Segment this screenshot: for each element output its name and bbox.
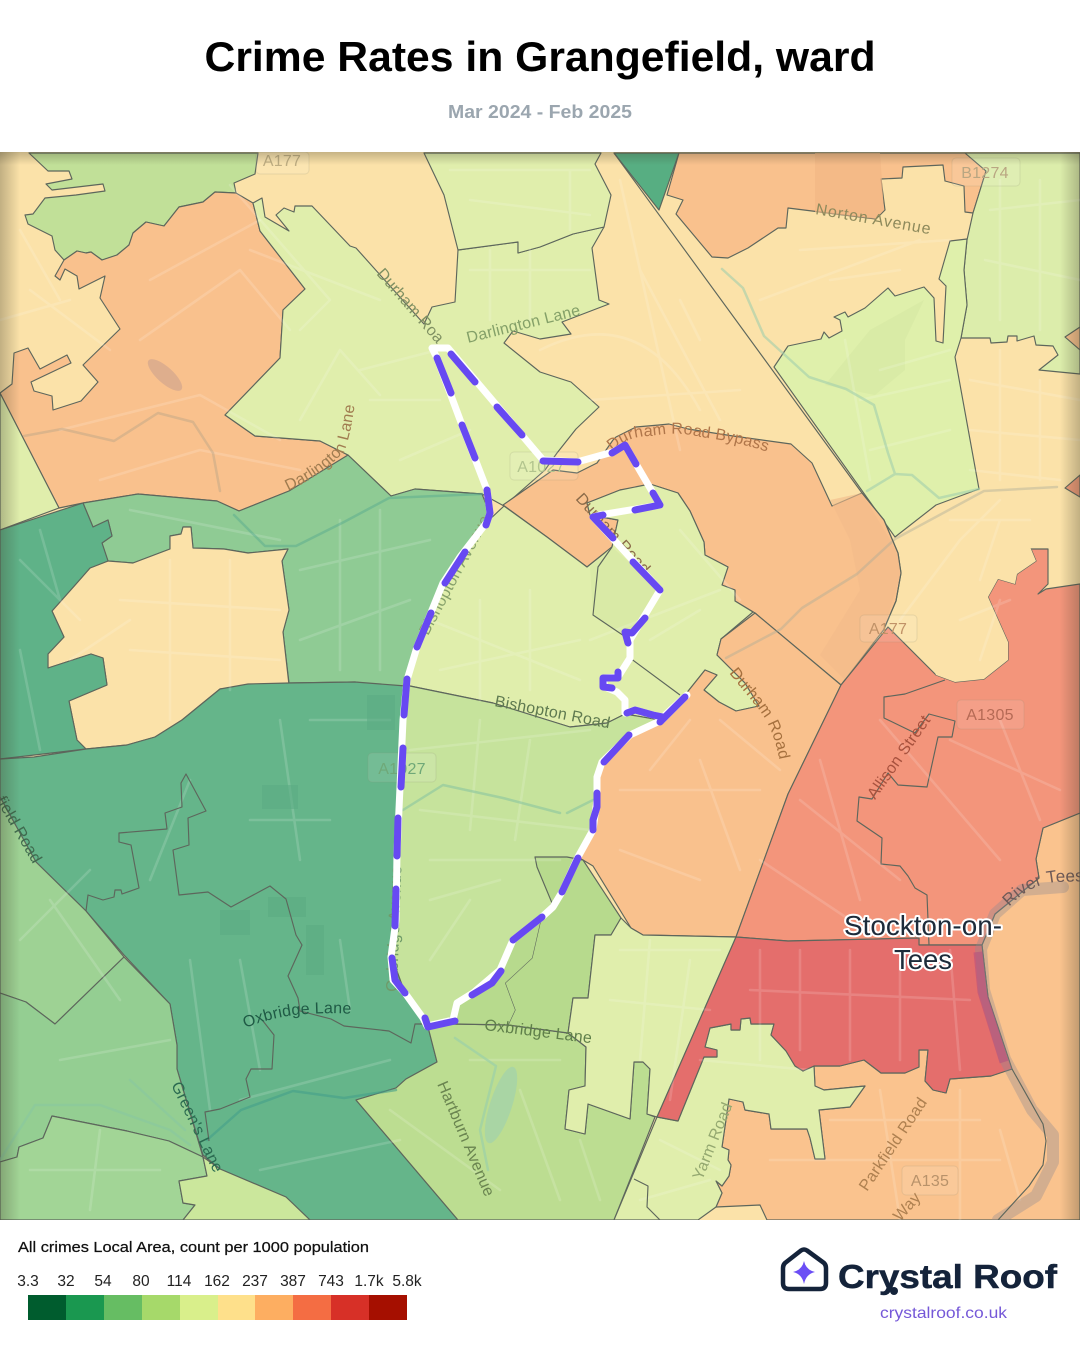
legend value labels: 5.8k — [392, 1273, 422, 1290]
ward outline white — [391, 348, 687, 1026]
label A135: A135 — [911, 1173, 949, 1190]
label Oxbridge Lane west: Oxbridge Lane — [244, 1002, 351, 1026]
legend value labels: 80 — [132, 1273, 150, 1290]
area: small edge orange — [1065, 327, 1080, 350]
label A1027 north: A1027 — [517, 459, 565, 476]
ward inner cell shade — [603, 547, 612, 555]
area: small lime cell south — [179, 1157, 310, 1220]
area: north-west green — [25, 153, 258, 260]
icon: house with star — [783, 1250, 826, 1289]
area: Durham Road north yellow-green — [225, 198, 609, 506]
legend value labels: 114 — [167, 1273, 192, 1290]
ward outline purple dashes — [392, 354, 685, 1027]
shield A1305 — [957, 700, 1024, 729]
label A1305: A1305 — [966, 707, 1014, 724]
area: south-east orange — [716, 813, 1080, 1220]
legend value labels: 32 — [57, 1273, 75, 1290]
legend value labels — [17, 1273, 422, 1290]
area: mid green north-west of ward — [83, 455, 490, 690]
place label: Stockton-on-Tees — [844, 910, 1002, 975]
label Bishopton Road: Bishopton Road — [493, 693, 612, 732]
subtitle: date range: Mar 2024 - Feb 2025 — [448, 101, 632, 122]
subtle building blocks in dark green — [220, 695, 395, 975]
label Durham Road north: Durham Roa — [373, 265, 447, 347]
icon: key drop on y — [890, 1287, 898, 1295]
road shields — [256, 152, 1024, 1195]
place label: Stockton-on-Tees: Tees — [894, 944, 952, 975]
shield A177 north — [256, 152, 309, 174]
bypass darker shade — [830, 493, 900, 680]
label Oxbridge Avenue: Oxbridge Avenue — [384, 865, 405, 992]
place label: Stockton-on-Tees: Stockton-on- — [844, 910, 1002, 941]
shield A177 east — [860, 615, 917, 642]
internal boundary lines — [86, 774, 430, 1043]
area: town centre coral — [736, 549, 1080, 945]
area: orange south of Durham Road — [578, 613, 841, 937]
area: far west yellow-green — [0, 393, 59, 530]
label A177: A177 — [263, 153, 301, 170]
title: Crime Rates in Grangefield, ward — [204, 33, 876, 80]
river over red district — [978, 952, 1004, 1062]
area: south-west green middle — [0, 957, 203, 1162]
logo: Crystal Roof — [783, 1250, 1058, 1322]
label Way: Way — [890, 1189, 924, 1225]
wordmark: Crystal Roof — [838, 1258, 1058, 1295]
label Bishopton Avenue: Bishopton Avenue — [417, 513, 494, 638]
label Durham Road south: Durham Road — [730, 667, 790, 759]
ward light green east sliver — [457, 923, 540, 1025]
label A1027 south: A1027 — [378, 761, 426, 778]
map edge vignette — [0, 152, 1080, 1220]
label Oxbridge Lane east: Oxbridge Lane — [484, 1017, 593, 1047]
area: darker green south of ward — [505, 857, 621, 1033]
map background: low-mid crime area — [0, 152, 1080, 1220]
lake — [478, 1064, 524, 1146]
shield A135 — [902, 1166, 958, 1195]
legend title: All crimes Local Area, count per 1000 population — [18, 1239, 369, 1256]
label Parkfield Road: Parkfield Road — [856, 1095, 931, 1194]
west pond — [143, 354, 187, 396]
area: south yellow-green estate — [565, 918, 736, 1134]
label Durham Road Bypass: Durham Road Bypass — [606, 422, 768, 451]
label B1274: B1274 — [961, 165, 1009, 182]
legend value labels: 743 — [318, 1273, 344, 1290]
shield A1027 south — [368, 753, 436, 782]
label Darlington Lane: Darlington Lane — [465, 302, 582, 347]
legend value labels: 387 — [280, 1273, 306, 1290]
area: top teal cell — [614, 153, 679, 210]
area: south-west green lower — [0, 1116, 207, 1220]
shield B1274 — [952, 158, 1020, 186]
label Green's Lane: Green's Lane — [167, 1079, 226, 1175]
label Yarm Road: Yarm Road — [690, 1100, 736, 1182]
ward boundary: Grangefield — [391, 348, 687, 1027]
area: south-west green upper — [0, 797, 124, 1024]
river boundary line — [998, 1069, 1046, 1220]
area: light-orange estate west — [48, 527, 289, 749]
label Durham Road middle: Durham Road — [572, 490, 653, 578]
area: main Grangefield yellow-green — [405, 484, 759, 727]
area: highest-crime red — [657, 937, 1012, 1121]
legend value labels: 237 — [242, 1273, 268, 1290]
legend value labels: 54 — [94, 1273, 112, 1290]
area: dark green central west — [0, 682, 458, 1220]
shield A1027 north — [510, 452, 578, 480]
label Allison Street: Allison Street — [864, 712, 935, 802]
legend value labels: 3.3 — [17, 1273, 39, 1290]
area: east light-orange overlap — [935, 548, 1036, 682]
inner coral ward boundaries — [857, 680, 955, 945]
legend colour scale — [28, 1295, 407, 1320]
park shading inside east centre — [825, 300, 924, 395]
legend — [17, 1239, 422, 1320]
north-east orange darker shade — [815, 153, 884, 219]
area: dark green north-west — [0, 503, 112, 759]
area: small edge coral — [1065, 475, 1080, 497]
light road network — [0, 170, 1080, 1220]
area: north-east yellow-green — [961, 153, 1080, 374]
area: north centre yellow-green — [424, 153, 611, 253]
area: ward light green below Bishopton Road — [393, 685, 660, 1027]
website link: crystalroof.co.uk — [880, 1305, 1008, 1322]
label A177 east: A177 — [869, 621, 907, 638]
streams and water lines — [0, 269, 1063, 1220]
area: Yarm Road yellow-green — [614, 1018, 865, 1220]
area: bypass orange — [503, 424, 901, 685]
label Hartburn Avenue: Hartburn Avenue — [433, 1079, 497, 1199]
legend value labels: 1.7k — [354, 1273, 384, 1290]
area: north-east orange — [667, 153, 986, 258]
area: east centre yellow-green — [774, 239, 979, 537]
area: west orange — [0, 192, 348, 511]
legend value labels: 162 — [204, 1273, 230, 1290]
area: south light green — [356, 1024, 655, 1220]
label Norton Avenue: Norton Avenue — [814, 201, 933, 238]
choropleth map — [0, 152, 1080, 1220]
label Darlington Lane west: Darlington Lane — [284, 405, 354, 490]
